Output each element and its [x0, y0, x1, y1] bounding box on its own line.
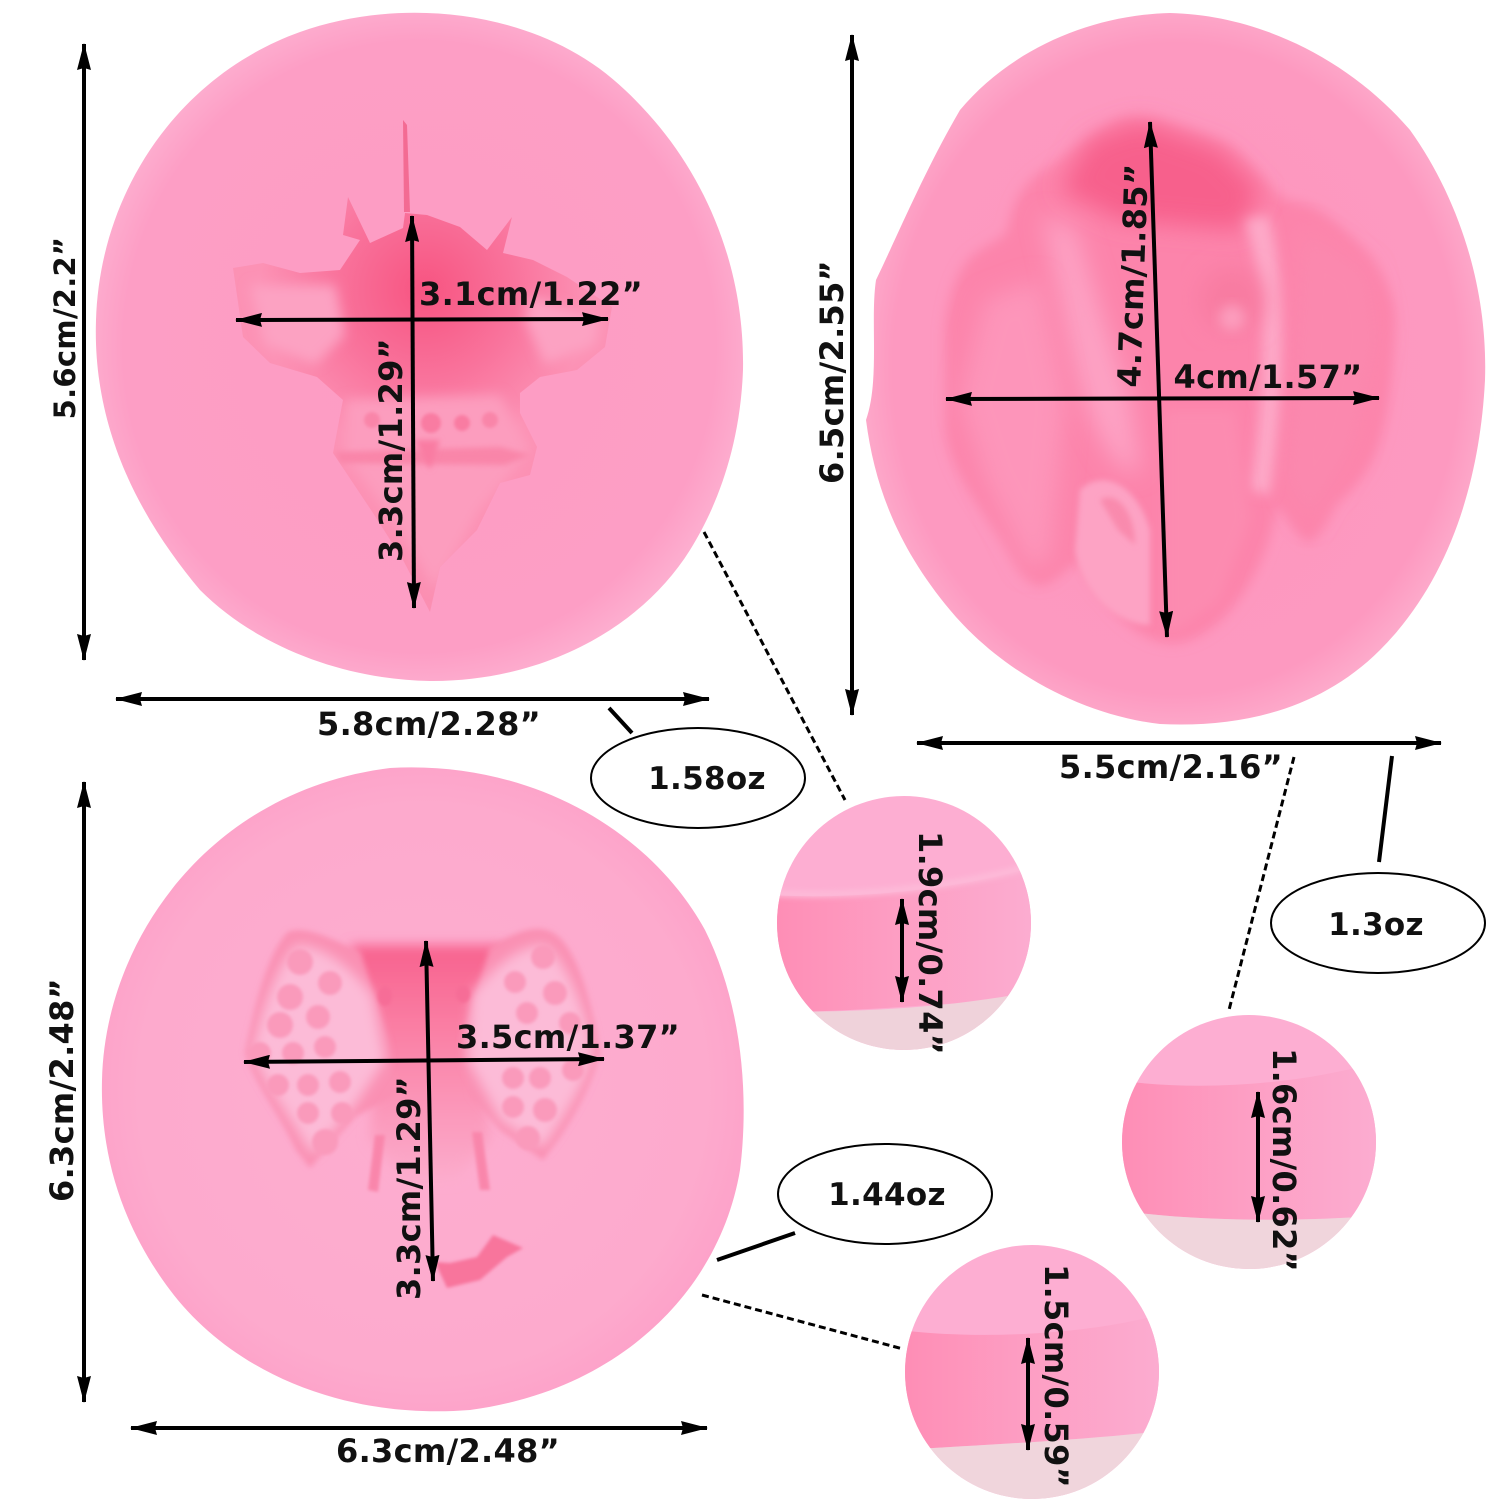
- dimension labels: 5.8cm/2.28”: [317, 705, 541, 743]
- dimension labels: 3.3cm/1.29”: [390, 1076, 428, 1300]
- mold: top left: [96, 13, 743, 681]
- dimension labels: 6.3cm/2.48”: [336, 1432, 560, 1470]
- crack line: [403, 120, 410, 212]
- side view circle 2: [1122, 1015, 1376, 1269]
- cavity: elephant face: [245, 929, 600, 1288]
- dimension labels: 3.5cm/1.37”: [456, 1018, 680, 1056]
- weight labels: 1.44oz: [828, 1177, 946, 1213]
- dimension labels: 6.5cm/2.55”: [813, 260, 851, 484]
- dimension labels: 4.7cm/1.85”: [1110, 163, 1156, 388]
- dimension labels: 5.6cm/2.2”: [48, 237, 82, 419]
- weight ellipses: [591, 728, 1485, 1244]
- side view circle 3: [900, 1240, 1170, 1500]
- dimension labels: 6.3cm/2.48”: [43, 978, 81, 1202]
- dimension labels: 1.5cm/0.59”: [1037, 1264, 1075, 1488]
- dimension labels: 1.9cm/0.74”: [911, 831, 949, 1055]
- cavity: elephant front: [945, 118, 1395, 643]
- side view circle 1: [777, 796, 1031, 1050]
- cavity: elephant head: [220, 190, 620, 620]
- dimension labels: 1.6cm/0.62”: [1265, 1048, 1303, 1272]
- weight labels: 1.3oz: [1328, 907, 1424, 943]
- tusks: [368, 1135, 385, 1192]
- dimension labels: 4cm/1.57”: [1174, 358, 1362, 396]
- weight labels: [648, 761, 1424, 1213]
- dimension labels: 5.5cm/2.16”: [1059, 748, 1283, 786]
- dimension labels: 3.3cm/1.29”: [372, 338, 410, 562]
- leader lines: [609, 532, 1392, 1349]
- mold: top right: [866, 13, 1485, 725]
- trunk: [435, 1235, 523, 1288]
- dimension labels: [43, 163, 1362, 1488]
- dimension labels: 3.1cm/1.22”: [419, 275, 643, 313]
- mold: bottom left: [102, 767, 744, 1411]
- weight labels: 1.58oz: [648, 761, 766, 797]
